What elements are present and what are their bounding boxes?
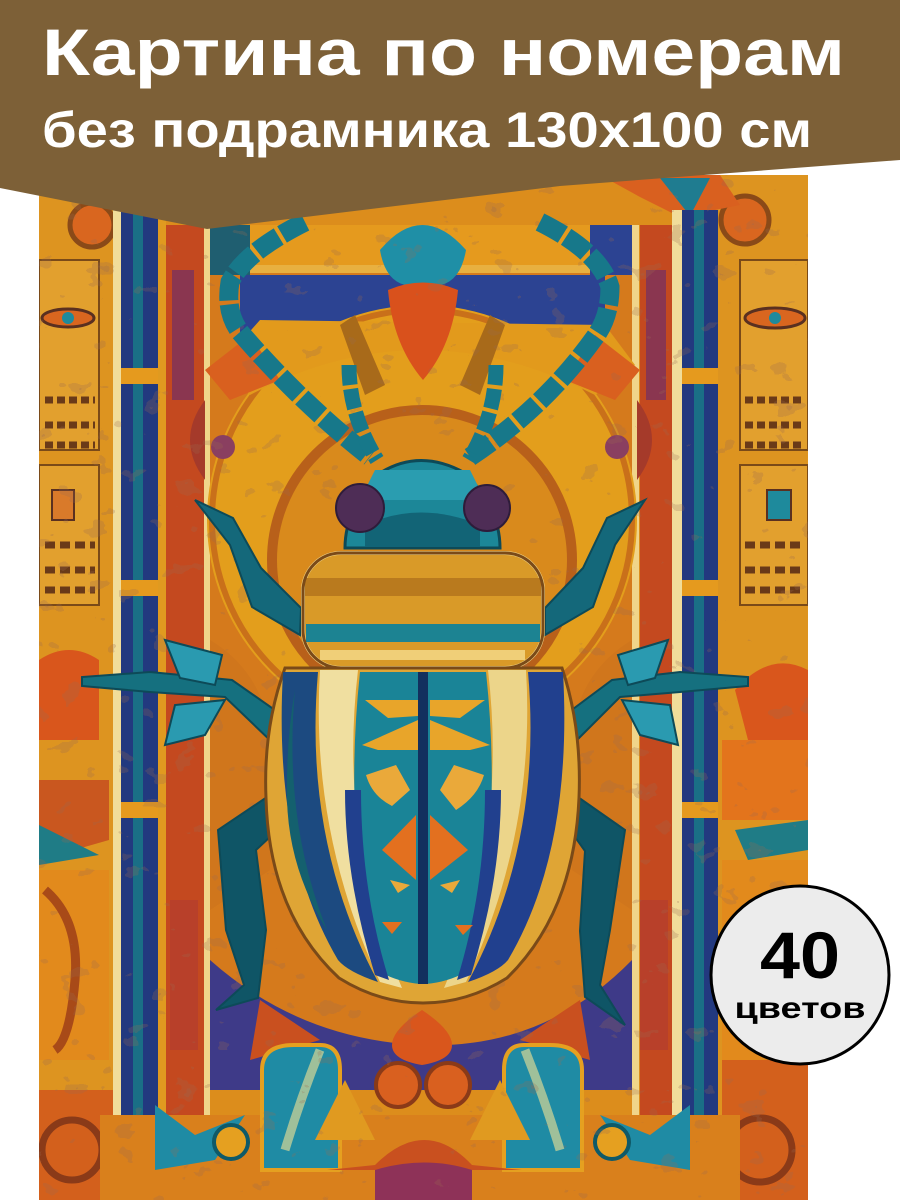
badge number: 40 xyxy=(760,918,840,992)
badge: 40 colours xyxy=(711,886,889,1064)
wing centre seam xyxy=(418,672,428,984)
beetle abdomen xyxy=(266,668,579,1003)
panel: left hieroglyph wall xyxy=(39,175,114,1200)
left wing stripes xyxy=(282,670,420,988)
top crest xyxy=(340,225,505,395)
central panel xyxy=(190,225,652,1090)
decorative columns xyxy=(113,210,718,1200)
beetle head xyxy=(336,460,510,548)
beetle legs xyxy=(82,500,748,1025)
bottom ornaments xyxy=(100,1045,740,1200)
banner: brown header xyxy=(0,0,900,229)
subtitle: без подрамника 130х100 см xyxy=(42,102,812,158)
panel: right hieroglyph wall xyxy=(600,175,808,1200)
beetle thorax xyxy=(303,553,543,668)
paint mottling texture xyxy=(39,175,808,1200)
painting: scarab beetle xyxy=(39,175,808,1200)
wing ornaments xyxy=(362,700,490,935)
right wing stripes xyxy=(426,670,564,988)
beetle antennae xyxy=(229,222,610,460)
title: Картина по номерам xyxy=(42,15,845,89)
badge caption: цветов xyxy=(734,992,866,1025)
